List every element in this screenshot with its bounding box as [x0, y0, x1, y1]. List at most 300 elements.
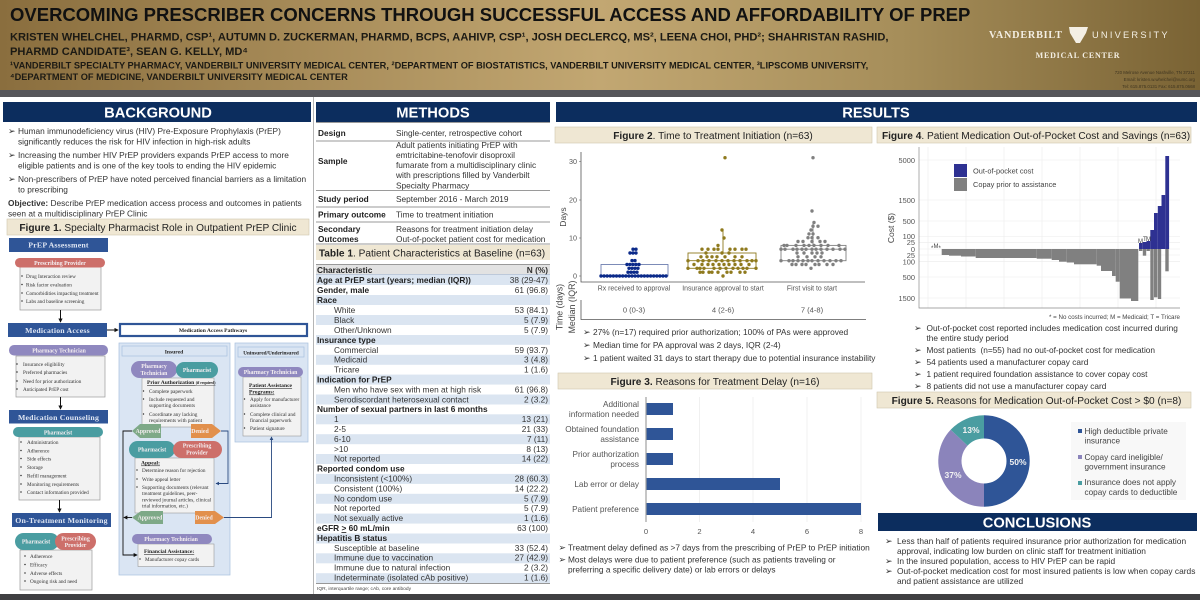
figure 4 bullets: ➢ — [914, 346, 922, 356]
step: on-treatment monitoring: On-Treatment Monitoring — [15, 516, 108, 525]
chart: out-of-pocket cost and savings: T — [1143, 237, 1147, 243]
chart: reasons for delay bars: information needed — [569, 410, 639, 419]
heading: methods — [316, 102, 550, 122]
step: PrEP assessment: Risk factor evaluation — [26, 282, 72, 288]
figure 2 caption: Figure 2. Time to Treatment Initiation (n=63) — [613, 131, 813, 142]
financial assistance box: Manufacturer copay cards — [145, 556, 199, 563]
affiliations: ⁴DEPARTMENT OF MEDICINE, VANDERBILT UNIVERSITY MEDICAL CENTER — [10, 72, 348, 82]
table 1: patient characteristics: IQR, interquartile range; cAb, core antibody — [317, 586, 412, 592]
background bullets — [8, 126, 307, 194]
figure 4 bullets — [914, 323, 1178, 392]
panel: uninsured pathway: Apply for manufacturer — [250, 396, 300, 403]
figure 5 caption — [877, 392, 1191, 408]
donut chart: 37% — [944, 470, 962, 480]
chart: out-of-pocket cost and savings: 25 — [907, 238, 915, 247]
step: on-treatment monitoring: Ongoing risk and need — [30, 579, 78, 585]
figure 4 bullets: the entire study period — [926, 333, 1009, 343]
table 1: patient characteristics: Not reported — [334, 454, 381, 464]
step: on-treatment monitoring: Pharmacist — [22, 540, 50, 546]
table 1: patient characteristics: 63 (100) — [517, 523, 548, 533]
chart: time to treatment dot and box plot — [558, 152, 865, 292]
arrow to pathways — [107, 329, 118, 331]
conclusion bullets: and patient assistance are utilized — [897, 576, 1024, 586]
panel: uninsured pathway: Programs: — [249, 390, 275, 396]
background bullets: Increasing the number HIV PrEP providers expands PrEP access to more — [18, 150, 289, 160]
chart: reasons for delay bars: 8 — [859, 527, 863, 536]
table 1: patient characteristics: eGFR > 60 mL/min — [317, 523, 390, 533]
chart: out-of-pocket cost and savings: 100 — [903, 258, 915, 266]
arrow — [58, 500, 60, 512]
donut legend: Insurance does not apply — [1084, 478, 1177, 487]
step: medication access: Need for prior authorization — [23, 378, 82, 385]
conclusion bullets: ➢ — [885, 567, 893, 577]
study design table: Design — [318, 128, 346, 138]
chart: out-of-pocket cost and savings: * = No costs incurred; M = Medicaid; T = Tricare — [1049, 314, 1181, 321]
Vanderbilt logo: MEDICAL CENTER — [1036, 51, 1120, 60]
objective: seen at a multidisciplinary PrEP Clinic — [8, 208, 147, 218]
panel: uninsured pathway — [235, 343, 308, 442]
panel: methods — [316, 102, 550, 592]
chart: reasons for delay bars: Prior authorization — [573, 450, 639, 459]
study design table: with prescriptions filled by Vanderbilt — [395, 170, 530, 180]
figure 1 caption — [7, 219, 309, 235]
step: PrEP assessment: Drug Interaction review — [26, 274, 76, 280]
donut legend: government insurance — [1084, 462, 1166, 472]
donut legend: High deductible private — [1084, 427, 1168, 436]
study design table: Primary outcome — [318, 210, 386, 220]
appeal box: Appeal: — [141, 460, 160, 466]
heading: background — [3, 102, 311, 122]
authors: KRISTEN WHELCHEL, PHARMD, CSP¹, AUTUMN D. ZUCKERMAN, PHARMD, BCPS, AAHIVP, CSP¹, JOSH DECLERCQ, MS², LEENA CHOI, PHD²; SHAHRISTAN RASHID, — [10, 32, 888, 44]
figure 4 bullets: Most patients (n=55) had no out-of-pocket cost for medication — [926, 345, 1155, 355]
table 1: patient characteristics: Insurance type — [317, 335, 376, 345]
panel: uninsured pathway: financial paperwork — [250, 417, 292, 424]
appeal box: Supporting documents (relevant — [142, 484, 209, 491]
Vanderbilt logo: VANDERBILT — [989, 30, 1063, 41]
table 1: patient characteristics — [316, 264, 550, 592]
approved tag: Approved — [136, 429, 161, 435]
step: medication access: Medication Access — [25, 326, 90, 335]
table 1: patient characteristics: 7 (11) — [527, 434, 548, 444]
step: medication access: Insurance eligibility — [23, 362, 65, 368]
poster title: OVERCOMING PRESCRIBER CONCERNS THROUGH SUCCESSFUL ACCESS AND AFFORDABILITY OF PREP — [10, 4, 970, 25]
figure 3 caption: Figure 3. Reasons for Treatment Delay (n=16) — [610, 377, 820, 388]
table 1: patient characteristics: 5 (7.9) — [524, 503, 548, 513]
prior authorization box: requirements with patient — [149, 418, 203, 424]
table 1: patient characteristics: 14 (22) — [522, 454, 548, 464]
chart: reasons for delay bars — [565, 397, 863, 536]
chart: out-of-pocket cost and savings: * — [931, 246, 934, 252]
affiliations — [10, 60, 868, 82]
financial assistance box: Financial Assistance: — [144, 549, 194, 555]
chart: time to treatment dot and box plot: First visit to start — [787, 286, 837, 292]
figure 2 bullets: ➢ — [583, 341, 591, 351]
chart: time to treatment dot and box plot: Rx received to approval — [598, 286, 671, 292]
step: medication counseling — [9, 410, 108, 500]
chart: reasons for delay bars: 6 — [805, 527, 809, 536]
step: medication counseling: Pharmacist — [44, 430, 72, 436]
step: medication access — [8, 323, 108, 397]
prior authorization box: Coordinate any lacking — [149, 412, 198, 418]
table 1: patient characteristics: Inconsistent (<100%) — [334, 474, 412, 484]
study design table: Specialty Pharmacy — [396, 180, 470, 190]
chart: out-of-pocket cost and savings: * — [938, 246, 942, 252]
table 1: patient characteristics: Age at PrEP start (years; median (IQR)) — [317, 275, 471, 285]
figure 4 caption: Figure 4. Patient Medication Out-of-Pocket Cost and Savings (n=63) — [882, 131, 1190, 142]
step: medication counseling: Administration — [27, 440, 59, 446]
background bullets: ➢ — [8, 175, 16, 185]
authors: PHARMD CANDIDATE³, SEAN G. KELLY, MD⁴ — [10, 46, 248, 58]
approved tag: Approved — [138, 516, 163, 522]
table 1: patient characteristics: >10 — [334, 444, 348, 454]
affiliations: ¹VANDERBILT SPECIALTY PHARMACY, VANDERBILT UNIVERSITY MEDICAL CENTER, ²DEPARTMENT OF BIOSTATISTICS, VANDERBILT UNIVERSITY MEDICAL CENTER, ³LIPSCOMB UNIVERSITY, — [10, 60, 868, 70]
conclusion bullets — [885, 536, 1195, 586]
denied tag: Denied — [191, 429, 209, 435]
heading: conclusions — [878, 513, 1197, 531]
time table under chart — [554, 281, 866, 333]
conclusion bullets: ➢ — [885, 537, 893, 547]
figure 2 bullets: ➢ — [583, 354, 591, 364]
table 1: patient characteristics: 5 (7.9) — [524, 493, 548, 503]
table 1: patient characteristics: 1 (1.6) — [524, 513, 548, 523]
chart: out-of-pocket cost and savings: 5000 — [899, 156, 915, 165]
time table under chart: 4 (2-6) — [712, 306, 735, 314]
chart: reasons for delay bars: process — [610, 460, 639, 469]
table 1: patient characteristics: Reported condom use — [317, 464, 405, 474]
table 1: patient characteristics: Immune due to natural infection — [334, 563, 451, 573]
step: on-treatment monitoring: Efficacy — [30, 562, 48, 568]
study design table — [316, 122, 550, 244]
table 1 caption: Table 1. Patient Characteristics at Baseline (n=63) — [319, 248, 545, 260]
table 1: patient characteristics: Immune due to vaccination — [334, 553, 434, 563]
arrow — [60, 310, 62, 322]
chart: out-of-pocket cost and savings — [886, 147, 1181, 321]
step: on-treatment monitoring: Adverse effects — [30, 570, 62, 577]
chart legend: Out-of-pocket cost — [973, 166, 1033, 176]
study design table: Single-center, retrospective cohort — [396, 128, 523, 138]
donut chart: 50% — [1009, 457, 1027, 467]
background bullets: Human immunodeficiency virus (HIV) Pre-Exposure Prophylaxis (PrEP) — [18, 126, 281, 136]
panel: figure 4 — [877, 127, 1191, 392]
table 1: patient characteristics: Indication for PrEP — [317, 374, 392, 384]
table 1: patient characteristics: 21 (33) — [522, 424, 548, 434]
chart legend: Copay prior to assistance — [973, 180, 1056, 189]
step: PrEP assessment — [9, 238, 108, 310]
table 1: patient characteristics: Commercial — [334, 345, 378, 355]
study design table: Adult patients initiating PrEP with — [396, 140, 518, 150]
conclusion bullets: ➢ — [885, 557, 893, 567]
figure 2 caption — [555, 127, 872, 143]
study design table: Secondary — [318, 224, 361, 234]
table 1: patient characteristics: Susceptible at baseline — [334, 543, 420, 553]
table 1: patient characteristics: Tricare — [334, 365, 360, 375]
approved tag — [132, 511, 163, 524]
prior authorization box: Prior Authorization (if required) — [147, 380, 216, 386]
heading: conclusions: CONCLUSIONS — [983, 515, 1091, 531]
conclusion bullets: In the insured population, access to HIV PrEP can be rapid — [897, 556, 1116, 566]
chart: out-of-pocket cost and savings: 100 — [903, 232, 915, 241]
table 1: patient characteristics: 1 — [334, 414, 339, 424]
conclusion bullets: Less than half of patients required insurance prior authorization for medication — [897, 536, 1186, 546]
figure 3 bullets: Treatment delay defined as >7 days from the prescribing of PrEP to PrEP initiation — [568, 542, 870, 552]
heading: background: BACKGROUND — [104, 105, 212, 121]
prior authorization box: Pharmacist — [183, 368, 211, 374]
chart: time to treatment dot and box plot: 10 — [569, 234, 577, 242]
table 1: patient characteristics: 27 (42.9) — [515, 553, 548, 563]
step: medication access: Pharmacy Technician — [32, 348, 87, 354]
appeal box: reviewed journal articles, clinical — [142, 498, 212, 504]
contact details: 720 Melrose Avenue Nashville, TN 37211 — [1115, 70, 1196, 75]
footer band — [0, 594, 1200, 600]
background bullets: eligible patients and is one of the key tools to ending the HIV epidemic — [18, 160, 276, 170]
background bullets: to prescribing — [18, 184, 68, 194]
table 1: patient characteristics: Indeterminate (isolated cAb positive) — [334, 572, 468, 582]
step: medication access: Anticipated PrEP cost — [23, 387, 69, 393]
study design table: Sample — [318, 156, 348, 166]
figure 5 caption: Figure 5. Reasons for Medication Out-of-Pocket Cost > $0 (n=8) — [892, 396, 1181, 407]
objective: Objective: Describe PrEP medication access process and outcomes in patients — [8, 198, 302, 208]
time table under chart: Median (IQR) — [567, 281, 577, 333]
table 1: patient characteristics: Number of sexual partners in last 6 months — [317, 404, 488, 414]
chart: time to treatment dot and box plot: 30 — [569, 157, 577, 166]
step: on-treatment monitoring: Prescribing — [61, 536, 90, 542]
panel: insured pathway: Insured — [165, 350, 184, 356]
table 1: patient characteristics: 14 (22.2) — [515, 483, 548, 493]
conclusion bullets: approval, indicating low burden on clinic staff for treatment initiation — [897, 546, 1146, 556]
appeal box: trial information, etc.) — [142, 502, 188, 510]
chart: reasons for delay bars: Obtained foundation — [565, 425, 639, 434]
step: medication access: Preferred pharmacies — [23, 369, 67, 376]
table 1: patient characteristics: 13 (21) — [522, 414, 548, 424]
panel: uninsured pathway: Patient Assistance — [249, 383, 293, 389]
prior authorization box: Pharmacy — [141, 364, 167, 370]
donut chart — [944, 425, 1027, 495]
panel: uninsured pathway: Uninsured/Underinsured — [243, 350, 299, 356]
figure 4 bullets: ➢ — [914, 324, 922, 334]
chart: reasons for delay bars: assistance — [600, 435, 639, 444]
chart: out-of-pocket cost and savings: 25 — [907, 251, 915, 260]
approved tag — [132, 424, 161, 438]
table 1: patient characteristics: Not reported — [334, 503, 381, 513]
study design table: Outcomes — [318, 234, 359, 244]
donut chart: 13% — [962, 425, 980, 435]
step: medication counseling: Storage — [27, 465, 44, 471]
panel: figure 5 — [877, 392, 1191, 500]
time table under chart: Time (days) — [554, 284, 564, 330]
chart: out-of-pocket cost and savings: 500 — [903, 273, 915, 282]
step: PrEP assessment: PrEP Assessment — [28, 240, 89, 250]
chart: reasons for delay bars: Additional — [603, 400, 639, 409]
table 1: patient characteristics: 2 (3.2) — [524, 394, 548, 404]
chart: reasons for delay bars: 0 — [644, 527, 648, 536]
table 1: patient characteristics: Other/Unknown — [334, 325, 392, 335]
figure 3 bullets: preferring a specific delivery date) or lab errors or delays — [568, 564, 776, 574]
chart: out-of-pocket cost and savings: 0 — [911, 245, 915, 254]
denied tag: Denied — [195, 516, 213, 522]
table 1: patient characteristics: 53 (84.1) — [515, 305, 548, 315]
figure 4 bullets: ➢ — [914, 358, 922, 368]
appeal box: Write appeal letter — [142, 477, 181, 483]
Vanderbilt logo — [989, 27, 1170, 60]
table 1: patient characteristics: 3 (4.8) — [524, 355, 548, 365]
table 1: patient characteristics: 33 (52.4) — [515, 543, 548, 553]
table 1: patient characteristics: 2-5 — [334, 424, 346, 434]
step: medication counseling: Monitoring requirements — [27, 482, 79, 488]
heading: results — [556, 102, 1197, 122]
chart: reasons for delay bars: Patient preference — [572, 505, 639, 514]
appeal box — [129, 441, 222, 513]
step: medication counseling: Contact information provided — [27, 489, 89, 496]
chart: out-of-pocket cost and savings: 1500 — [899, 294, 915, 303]
figure 3 caption — [558, 373, 872, 389]
time table under chart: 7 (4-8) — [801, 306, 824, 314]
table 1: patient characteristics: 61 (96.8) — [515, 384, 548, 394]
figure 4 bullets: 1 patient required foundation assistance to cover copay cost — [926, 369, 1148, 379]
figure 3 bullets: ➢ — [558, 544, 566, 554]
table 1: patient characteristics: Hepatitis B status — [317, 533, 387, 543]
denied tag — [195, 511, 224, 524]
pathway connector arrows — [123, 431, 272, 555]
denied tag — [191, 424, 221, 438]
prior authorization box: Complete paperwork — [149, 389, 193, 395]
table 1: patient characteristics: Serodiscordant heterosexual contact — [334, 394, 469, 404]
appeal box: Prescribing — [183, 444, 211, 450]
background bullets: ➢ — [8, 151, 16, 161]
figure 3 bullets — [558, 542, 870, 574]
chart: reasons for delay bars: 2 — [697, 527, 702, 536]
prior authorization box: supporting documents — [149, 403, 195, 409]
table 1: patient characteristics: 2 (3.2) — [524, 563, 548, 573]
chart: out-of-pocket cost and savings: 1500 — [899, 196, 915, 205]
table 1: patient characteristics: 5 (7.9) — [524, 315, 548, 325]
study design table: fumarate from a multidisciplinary clinic — [396, 160, 536, 170]
panel: background — [3, 102, 311, 235]
background bullets: significantly reduces the risk for HIV infection in high-risk adults — [18, 136, 250, 146]
step: on-treatment monitoring: Adherence — [30, 554, 53, 560]
table 1: patient characteristics: 5 (7.9) — [524, 325, 548, 335]
panel: uninsured pathway: Complete clinical and — [250, 412, 296, 418]
heading: methods: METHODS — [396, 105, 470, 121]
chart legend — [954, 164, 1056, 191]
header banner — [0, 0, 1200, 97]
table 1: patient characteristics: No condom use — [334, 493, 392, 503]
panel: uninsured pathway: assistance — [250, 403, 271, 409]
contact details — [1115, 70, 1196, 89]
panel: uninsured pathway: Patient signature — [250, 426, 285, 432]
table 1: patient characteristics: 61 (96.8) — [515, 285, 548, 295]
appeal box: Provider — [186, 450, 208, 456]
table 1: patient characteristics: 59 (93.7) — [515, 345, 548, 355]
table 1: patient characteristics: Gender, male — [317, 285, 369, 295]
chart: time to treatment dot and box plot: Insurance approval to start — [682, 286, 764, 292]
chart: reasons for delay bars: Lab error or delay — [574, 480, 640, 489]
figure 4 caption — [877, 127, 1191, 143]
prior authorization box: Technician — [141, 371, 168, 377]
table 1: patient characteristics: Black — [334, 315, 355, 325]
background bullets: Non-prescribers of PrEP have noted perceived financial barriers as a limitation — [18, 174, 307, 184]
objective — [8, 198, 302, 218]
panel: uninsured pathway: Pharmacy Technician — [244, 370, 298, 376]
table 1: patient characteristics: 8 (13) — [526, 444, 548, 454]
table 1: patient characteristics: 6-10 — [334, 434, 351, 444]
chart: out-of-pocket cost and savings: 500 — [903, 217, 915, 226]
study design table: Out-of-pocket patient cost for medication — [396, 234, 546, 244]
step: medication counseling: Refill management — [27, 472, 67, 480]
study design table: Reasons for treatment initiation delay — [396, 224, 534, 234]
figure 2 bullets: Median time for PA approval was 2 days, IQR (2-4) — [593, 340, 781, 350]
chart: out-of-pocket cost and savings: M — [1146, 237, 1151, 243]
study design table: September 2016 - March 2019 — [396, 194, 509, 204]
medication access pathways header: Medication Access Pathways — [179, 328, 248, 334]
table 1: patient characteristics: Consistent (100%) — [334, 483, 402, 493]
donut legend: Copay card ineligible/ — [1084, 453, 1164, 462]
table 1: patient characteristics: 28 (60.3) — [515, 474, 548, 484]
table 1: patient characteristics: Not sexually active — [334, 513, 404, 523]
background bullets: ➢ — [8, 127, 16, 137]
table 1: patient characteristics: Race — [317, 295, 337, 305]
table 1: patient characteristics: Medicaid — [334, 355, 368, 365]
table 1: patient characteristics: 38 (29-47) — [510, 275, 548, 285]
chart: time to treatment dot and box plot: 0 — [573, 272, 577, 280]
appeal box: treatment guidelines, peer- — [142, 491, 198, 497]
prior authorization box: Include requested and — [149, 397, 195, 403]
figure 3 bullets: ➢ — [558, 556, 566, 566]
appeal box: Determine reason for rejection — [142, 467, 206, 474]
time table under chart: 0 (0-3) — [623, 306, 646, 314]
figure 2 bullets: 27% (n=17) required prior authorization; 100% of PAs were approved — [593, 327, 849, 337]
step: PrEP assessment: Comorbidities impacting treatment — [26, 291, 99, 297]
figure 4 bullets: Out-of-pocket cost reported includes medication cost incurred during — [926, 323, 1178, 333]
study design table: Study period — [318, 194, 369, 204]
flowchart: specialty pharmacist role — [8, 238, 308, 590]
figure 1 caption: Figure 1. Specialty Pharmacist Role in Outpatient PrEP Clinic — [19, 223, 297, 234]
chart: out-of-pocket cost and savings: M — [1138, 239, 1143, 245]
figure 4 bullets: ➢ — [914, 370, 922, 380]
figure 4 bullets: 8 patients did not use a manufacturer copay card — [926, 381, 1107, 391]
step: on-treatment monitoring — [12, 513, 111, 590]
contact details: Email: kristen.w.whelchel@vumc.org — [1124, 77, 1196, 82]
Vanderbilt logo: UNIVERSITY — [1092, 30, 1170, 40]
chart: out-of-pocket cost and savings: Cost ($) — [886, 213, 896, 243]
table 1: patient characteristics: N (%) — [527, 265, 548, 275]
panel: figure 3 — [558, 373, 872, 574]
contact details: Tel: 615.875.0131 Fax: 615.875.0668 — [1122, 84, 1196, 89]
medication access pathways header — [120, 324, 307, 336]
donut legend: insurance — [1084, 436, 1120, 446]
arrow — [60, 397, 62, 409]
table 1: patient characteristics: 1 (1.6) — [524, 572, 548, 582]
panel: figure 2 — [554, 127, 876, 364]
figure 4 bullets: ➢ — [914, 382, 922, 392]
financial assistance box: Pharmacy Technician — [144, 537, 199, 543]
table 1: patient characteristics: Men who have sex with men at high risk — [334, 384, 482, 394]
step: medication counseling: Side effects — [27, 456, 51, 462]
step: medication counseling: Adherence — [27, 448, 50, 454]
conclusion bullets: Out-of-pocket medication cost for most insured patients is low when copay cards — [897, 566, 1195, 576]
table 1: patient characteristics: 1 (1.6) — [524, 365, 548, 375]
step: PrEP assessment: Labs and baseline screening — [26, 299, 85, 305]
appeal box: Pharmacist — [138, 448, 166, 454]
study design table: Time to treatment initiation — [396, 210, 494, 220]
figure 2 bullets: ➢ — [583, 328, 591, 338]
figure 2 bullets — [583, 327, 876, 364]
panel: conclusions — [878, 513, 1197, 586]
prior authorization box — [131, 361, 218, 427]
figure 4 bullets: 54 patients used a manufacturer copay card — [926, 357, 1089, 367]
figure 2 bullets: 1 patient waited 31 days to start therapy due to potential insurance instability — [593, 353, 876, 363]
panel: insured pathway — [119, 343, 230, 575]
figure 3 bullets: Most delays were due to patient preference (such as patients traveling or — [568, 554, 836, 564]
